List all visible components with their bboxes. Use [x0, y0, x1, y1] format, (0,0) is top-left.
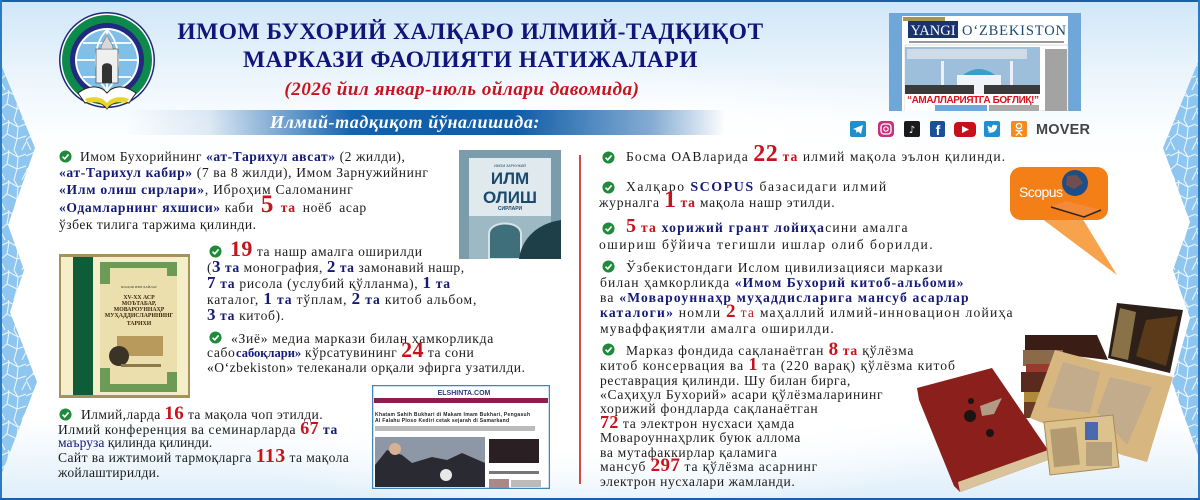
text: «ат-Тарихул кабир» (7 ва 8 жилди), Имом Зарнужийнинг — [59, 165, 429, 180]
text: жойлаштирилди. — [58, 465, 160, 480]
icon: twitter — [984, 121, 1000, 137]
text: кўрсатувининг 24 та сони — [305, 337, 474, 362]
news screenshot: Elshinta: Khatam Sahih Bukhari di Makam Imam Bukhari, Pengasuh — [375, 412, 530, 418]
text: хорижий фондларда сақланаётган — [600, 401, 818, 416]
text: articles and conferences — [58, 403, 349, 480]
icon: facebook: f — [936, 122, 941, 138]
text: «Одамларнинг яхшиси» каби 5 та ноёб асар — [59, 191, 367, 218]
newspaper: Yangi O'zbekiston — [889, 13, 1081, 111]
book cover: Ilm olish sirlari — [459, 150, 561, 259]
red leather book — [917, 368, 1048, 492]
text: ва мутафаккирлар қаламига — [600, 445, 777, 460]
text: 72 та электрон нусхаси ҳамда — [600, 412, 795, 432]
title — [177, 19, 764, 73]
text: 19 та нашр амалга оширилди — [230, 236, 423, 261]
Scopus callout: Scopus — [1019, 184, 1063, 200]
text: Мовароуннаҳрлик буюк аллома — [600, 430, 801, 445]
newspaper: Yangi O'zbekiston: YANGI — [910, 23, 956, 39]
text: ва «Мовароуннаҳр муҳаддисларига мансуб асарлар — [600, 290, 970, 305]
text: китоб консервация ва 1 та (220 варақ) қўлёзма китоб — [600, 354, 956, 374]
book cover: Ilm olish sirlari: ОЛИШ — [483, 188, 537, 207]
text: каталоги» номли 2 та маҳаллий илмий-инновацион лойиҳа — [600, 301, 1014, 322]
book cover: hadith scholars history: XV-XX АСР — [123, 295, 155, 301]
text: сабо — [207, 345, 235, 360]
divider — [579, 155, 580, 484]
social icons — [850, 121, 1091, 138]
right text: print media — [602, 141, 1006, 167]
book cover: hadith scholars history: МУҲАДДИСЛАРИНИНГ — [105, 313, 174, 319]
book cover: Ilm olish sirlari: ИМОМ ЗАРНУЖИЙ — [494, 164, 526, 168]
book cover: Ilm olish sirlari: СИРЛАРИ — [498, 206, 523, 212]
text: 5 та хорижий грант лойиҳасини амалга — [626, 215, 909, 237]
newspaper: Yangi O'zbekiston: “АМАЛЛАРИЯТГА БОҒЛИҚ!” — [907, 95, 1039, 106]
icon: tiktok — [904, 121, 920, 137]
icon: tiktok: ♪ — [909, 125, 915, 136]
text: Ziyo media programme — [207, 331, 525, 375]
text: билан ҳамкорликда «Имом Бухорий китоб-альбоми» — [600, 275, 965, 290]
left text: translations — [59, 149, 429, 232]
text: «Илм олиш сирлари», Иброҳим Саломанинг — [59, 182, 354, 197]
book cover: hadith scholars history: ТАРИХИ — [127, 321, 152, 327]
logo: Imam Bukhari center emblem — [59, 12, 155, 110]
icon: facebook — [930, 121, 945, 138]
text: мансуб 297 та қўлёзма асарнинг — [600, 455, 818, 476]
subtitle: period: (2026 йил январ-июль ойлари давомида) — [284, 79, 640, 100]
text: (3 та монография, 2 та замонавий нашр, — [207, 257, 465, 276]
text: «Саҳиҳул Бухорий» асари қўлёзмаларининг — [600, 387, 883, 402]
news screenshot: Elshinta: Al Falahu Ploso Kediri cetak sejarah di Samarkand — [375, 418, 509, 424]
text: маъруза қилинда қилинди. — [58, 435, 212, 450]
book cover: hadith scholars history: ШАҲОБ ИБН ЛАЙЛАТ — [121, 284, 158, 289]
icon: mover wordmark: MOVER — [1036, 122, 1091, 138]
icon: odnoklassniki — [1011, 121, 1027, 137]
book cover: hadith scholars history — [59, 254, 190, 398]
news screenshot: Elshinta — [372, 385, 550, 489]
back dark book — [1108, 303, 1183, 373]
text: «Зиё» медиа маркази билан ҳамкорликда — [231, 331, 494, 346]
right text: grants — [599, 215, 934, 252]
text: электрон нусхалари жамланди. — [600, 474, 795, 489]
text: журналга 1 та мақола нашр этилди. — [599, 187, 835, 213]
text: Сайт ва ижтимоий тармоқларга 113 та мақола — [58, 445, 349, 467]
right text: Islamic Civilization Center project — [600, 260, 1014, 336]
text: Илмий конференция ва семинарларда 67 та — [58, 418, 338, 438]
open manuscript — [1030, 350, 1173, 462]
icon: telegram — [850, 121, 866, 137]
manuscripts photo — [917, 303, 1183, 492]
book cover: hadith scholars history: МОЪТАБАР, — [122, 301, 157, 307]
title: ИМОМ БУХОРИЙ ХАЛҚАРО ИЛМИЙ-ТАДҚИҚОТ — [177, 19, 764, 45]
text: «O‘zbekiston» телеканали орқали эфирга узатилди. — [207, 360, 525, 375]
section ribbon: Илмий-тадқиқот йўналишида: — [270, 112, 540, 132]
text: каталог, 1 та тўплам, 2 та китоб альбом, — [207, 289, 477, 308]
text: Имом Бухорийнинг «ат-Тарихул авсат» (2 жилди), — [80, 149, 405, 164]
news screenshot: Elshinta: ELSHINTA.COM — [438, 390, 491, 397]
book cover: Ilm olish sirlari: ИЛМ — [491, 169, 529, 188]
Scopus callout — [1010, 167, 1117, 275]
text: ўзбек тилига таржима қилинди. — [59, 217, 256, 232]
icon: instagram — [878, 121, 894, 137]
text: Марказ фондида сақланаётган 8 та қўлёзма — [626, 339, 914, 360]
right text: Scopus — [598, 179, 888, 213]
text: Халқаро SCOPUS базасидаги илмий — [626, 179, 888, 195]
text: 7 та рисола (услубий қўлланма), 1 та — [207, 273, 451, 292]
stacked books — [1021, 335, 1108, 418]
small illuminated manuscript — [1044, 415, 1119, 475]
newspaper: Yangi O'zbekiston: O‘ZBEKISTON — [962, 23, 1067, 39]
text: Босма ОАВларида 22 та илмий мақола эълон қилинди. — [626, 141, 1006, 167]
text: Ўзбекистондаги Ислом цивилизацияси маркази — [626, 260, 944, 275]
text: реставрация қилинди. Шу билан бирга, — [600, 373, 851, 388]
right text: manuscripts — [600, 339, 956, 489]
icon: youtube — [954, 122, 976, 137]
text: сабоқлари» — [236, 346, 301, 360]
title: МАРКАЗИ ФАОЛИЯТИ НАТИЖАЛАРИ — [243, 47, 698, 73]
text: ошириш бўйича тегишли ишлар олиб борилди. — [599, 237, 934, 252]
book cover: hadith scholars history: МОВАРОУННАҲР — [114, 307, 165, 313]
text: 3 та китоб). — [207, 305, 285, 324]
section ribbon — [125, 110, 725, 135]
middle text: publications — [207, 236, 477, 324]
text: муваффақиятли амалга оширилди. — [600, 321, 835, 336]
text: Илмий,ларда 16 та мақола чоп этилди. — [81, 403, 323, 424]
